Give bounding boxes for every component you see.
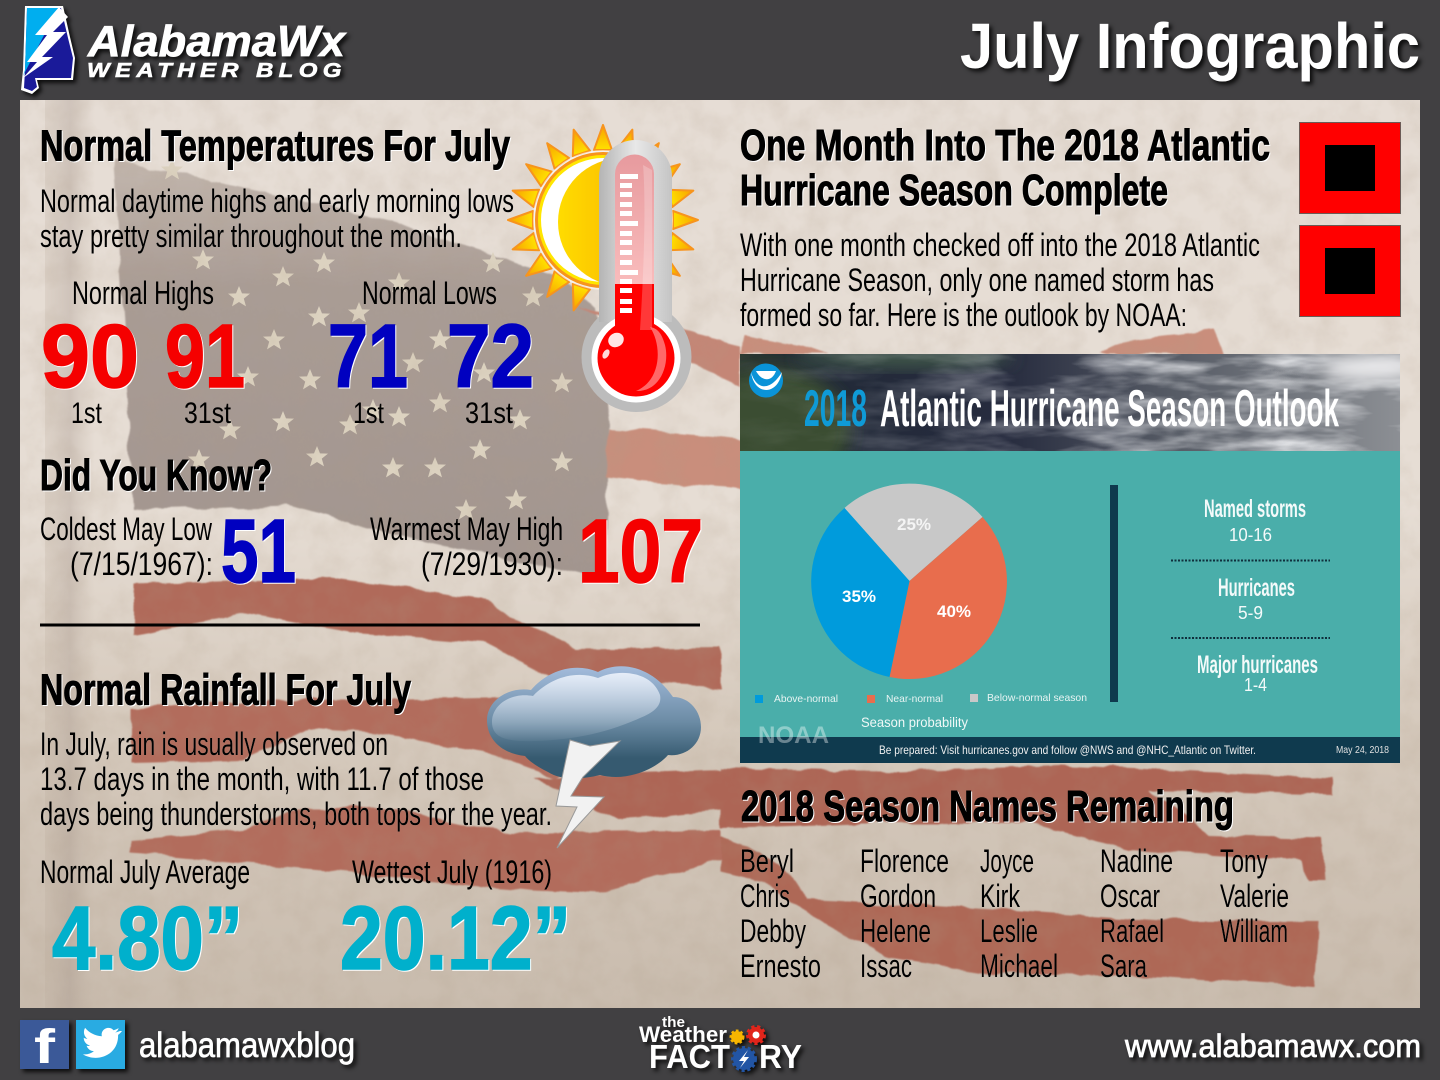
text block: hurricane summary: Hurricane Season, only one named storm has xyxy=(740,262,1214,298)
names column 4: Nadine xyxy=(1100,843,1173,879)
icon: hurricane warning flag top xyxy=(1300,122,1400,214)
icon: hurricane warning flag bottom xyxy=(1300,226,1400,316)
panel: hurricane season xyxy=(740,121,1400,333)
pie legend: Near-normal xyxy=(886,693,943,705)
NOAA watermark: NOAA xyxy=(758,722,829,749)
vertical divider bar xyxy=(1110,485,1118,702)
names column 4 xyxy=(1100,843,1173,984)
normal high values: 91 xyxy=(165,307,245,407)
normal high values xyxy=(41,307,245,407)
panel: did you know xyxy=(40,451,703,602)
panel: season names remaining xyxy=(740,782,1289,984)
heading: did you know: Did You Know? xyxy=(40,451,272,500)
text block: rainfall summary: days being thunderstorms, both tops for the year. xyxy=(40,796,552,832)
title: July Infographic xyxy=(960,10,1420,82)
text block: hurricane summary: formed so far. Here is the outlook by NOAA: xyxy=(740,297,1187,333)
heading: hurricane season: Hurricane Season Complete xyxy=(740,166,1168,215)
names column 2: Helene xyxy=(860,913,931,949)
date labels: 1st xyxy=(71,397,103,430)
normal July average label: Normal July Average xyxy=(40,854,250,890)
wettest July value: 20.12” xyxy=(340,889,571,989)
warmest high value: 107 xyxy=(578,502,703,602)
pie legend: Above-normal xyxy=(774,693,838,705)
logo: The Weather Factory: FACT xyxy=(649,1038,730,1075)
names column 5: Valerie xyxy=(1220,878,1289,914)
outlook numbers: 1-4 xyxy=(1244,675,1267,695)
names column 3: Michael xyxy=(980,948,1058,984)
text block: rainfall summary: In July, rain is usually observed on xyxy=(40,726,388,762)
outlook teal body xyxy=(740,451,1400,737)
pie legend xyxy=(755,692,1087,705)
names column 4: Oscar xyxy=(1100,878,1160,914)
outlook footer strip: Be prepared: Visit hurricanes.gov and follow @NWS and @NHC_Atlantic on Twitter. xyxy=(879,743,1256,757)
header bar xyxy=(0,0,1440,100)
names column 1: Chris xyxy=(740,878,790,914)
logo: The Weather Factory xyxy=(639,1014,802,1075)
normal highs label: Normal Highs xyxy=(72,275,214,311)
names column 4: Rafael xyxy=(1100,913,1164,949)
date labels: 31st xyxy=(184,397,232,430)
normal high values: 90 xyxy=(41,307,139,407)
names column 5: Tony xyxy=(1220,843,1268,879)
icon: Facebook xyxy=(20,1020,69,1074)
icon: Twitter xyxy=(76,1020,125,1069)
icon: storm cloud with lightning xyxy=(487,666,701,848)
outlook header banner xyxy=(740,354,1400,451)
heading: normal temperatures: Normal Temperatures For July xyxy=(40,122,510,170)
names column 2: Florence xyxy=(860,843,949,879)
coldest low label: (7/15/1967): xyxy=(70,546,213,582)
logo wordmark: AlabamaWx xyxy=(87,17,347,66)
outlook numbers: Named storms xyxy=(1204,495,1306,523)
logo wordmark: WEATHER BLOG xyxy=(87,59,341,82)
panel: NOAA outlook graphic xyxy=(700,348,1420,763)
heading: hurricane season xyxy=(740,121,1270,215)
names column 1: Ernesto xyxy=(740,948,821,984)
normal lows label: Normal Lows xyxy=(362,275,497,311)
outlook footer strip: May 24, 2018 xyxy=(1336,745,1389,756)
names column 1: Debby xyxy=(740,913,806,949)
date labels: 31st xyxy=(465,397,514,430)
pie chart: season probability xyxy=(811,484,1007,679)
text block: hurricane summary: With one month checked off into the 2018 Atlantic xyxy=(740,227,1260,263)
names column 2: Gordon xyxy=(860,878,936,914)
icon: thermometer xyxy=(582,140,692,412)
names column 3: Leslie xyxy=(980,913,1038,949)
heading: normal rainfall: Normal Rainfall For July xyxy=(40,666,411,714)
logo: AlabamaWx Weather Blog xyxy=(21,6,347,94)
coldest low value: 51 xyxy=(221,502,296,602)
icon: Facebook: f xyxy=(34,1021,56,1074)
website: www.alabamawx.com xyxy=(1124,1028,1421,1064)
pie legend: Below-normal season xyxy=(987,692,1087,704)
footer bar xyxy=(0,1008,1440,1080)
coldest low label: Coldest May Low xyxy=(40,511,213,547)
names column 3 xyxy=(980,843,1058,984)
panel: normal rainfall xyxy=(40,666,701,989)
icon: sun xyxy=(508,125,698,313)
heading: season names: 2018 Season Names Remaining xyxy=(741,782,1234,831)
date labels xyxy=(71,397,514,430)
pie caption: Season probability xyxy=(861,715,968,730)
coldest low label xyxy=(40,511,213,582)
names column 1 xyxy=(740,843,821,984)
warmest high label xyxy=(370,511,563,582)
social handle: alabamawxblog xyxy=(139,1026,355,1065)
text block: temperature summary: Normal daytime highs and early morning lows xyxy=(40,183,514,219)
normal low values: 71 xyxy=(328,307,408,407)
names column 5 xyxy=(1220,843,1289,949)
warmest high label: Warmest May High xyxy=(370,511,563,547)
names column 3: Kirk xyxy=(980,878,1021,914)
outlook numbers: Hurricanes xyxy=(1218,574,1295,602)
pie chart: season probability: 40% xyxy=(937,602,971,621)
pie chart: season probability: 35% xyxy=(842,587,876,606)
pie chart: season probability: 25% xyxy=(897,515,931,534)
panel: normal temperatures xyxy=(40,122,698,430)
text block: temperature summary xyxy=(40,183,514,254)
text block: rainfall summary: 13.7 days in the month, with 11.7 of those xyxy=(40,761,484,797)
outlook numbers: 10-16 xyxy=(1229,525,1272,545)
text block: hurricane summary xyxy=(740,227,1260,333)
normal low values xyxy=(328,307,534,407)
outlook numbers: Major hurricanes xyxy=(1197,651,1318,679)
wettest July label: Wettest July (1916) xyxy=(352,854,552,890)
outlook numbers xyxy=(1171,495,1330,695)
icon: Alabama state with lightning bolt xyxy=(21,6,75,94)
heading: hurricane season: One Month Into The 2018 Atlantic xyxy=(740,121,1270,170)
logo: The Weather Factory: Weather xyxy=(639,1022,727,1047)
logo: The Weather Factory: the xyxy=(662,1014,685,1031)
text block: rainfall summary xyxy=(40,726,552,832)
names column 2: Issac xyxy=(860,948,912,984)
icon: NOAA logo xyxy=(749,364,783,398)
normal low values: 72 xyxy=(447,307,534,407)
names column 3: Joyce xyxy=(980,843,1034,879)
names column 5: William xyxy=(1220,913,1288,949)
outlook title: 2018 xyxy=(804,380,867,438)
names column 1: Beryl xyxy=(740,843,794,879)
date labels: 1st xyxy=(353,397,385,430)
outlook footer strip xyxy=(740,737,1400,763)
warmest high label: (7/29/1930): xyxy=(421,546,563,582)
text block: temperature summary: stay pretty similar throughout the month. xyxy=(40,218,462,254)
names column 4: Sara xyxy=(1100,948,1147,984)
normal July average value: 4.80” xyxy=(52,889,243,989)
names column 2 xyxy=(860,843,949,984)
outlook numbers: 5-9 xyxy=(1238,603,1263,623)
logo: The Weather Factory: RY xyxy=(759,1038,802,1075)
